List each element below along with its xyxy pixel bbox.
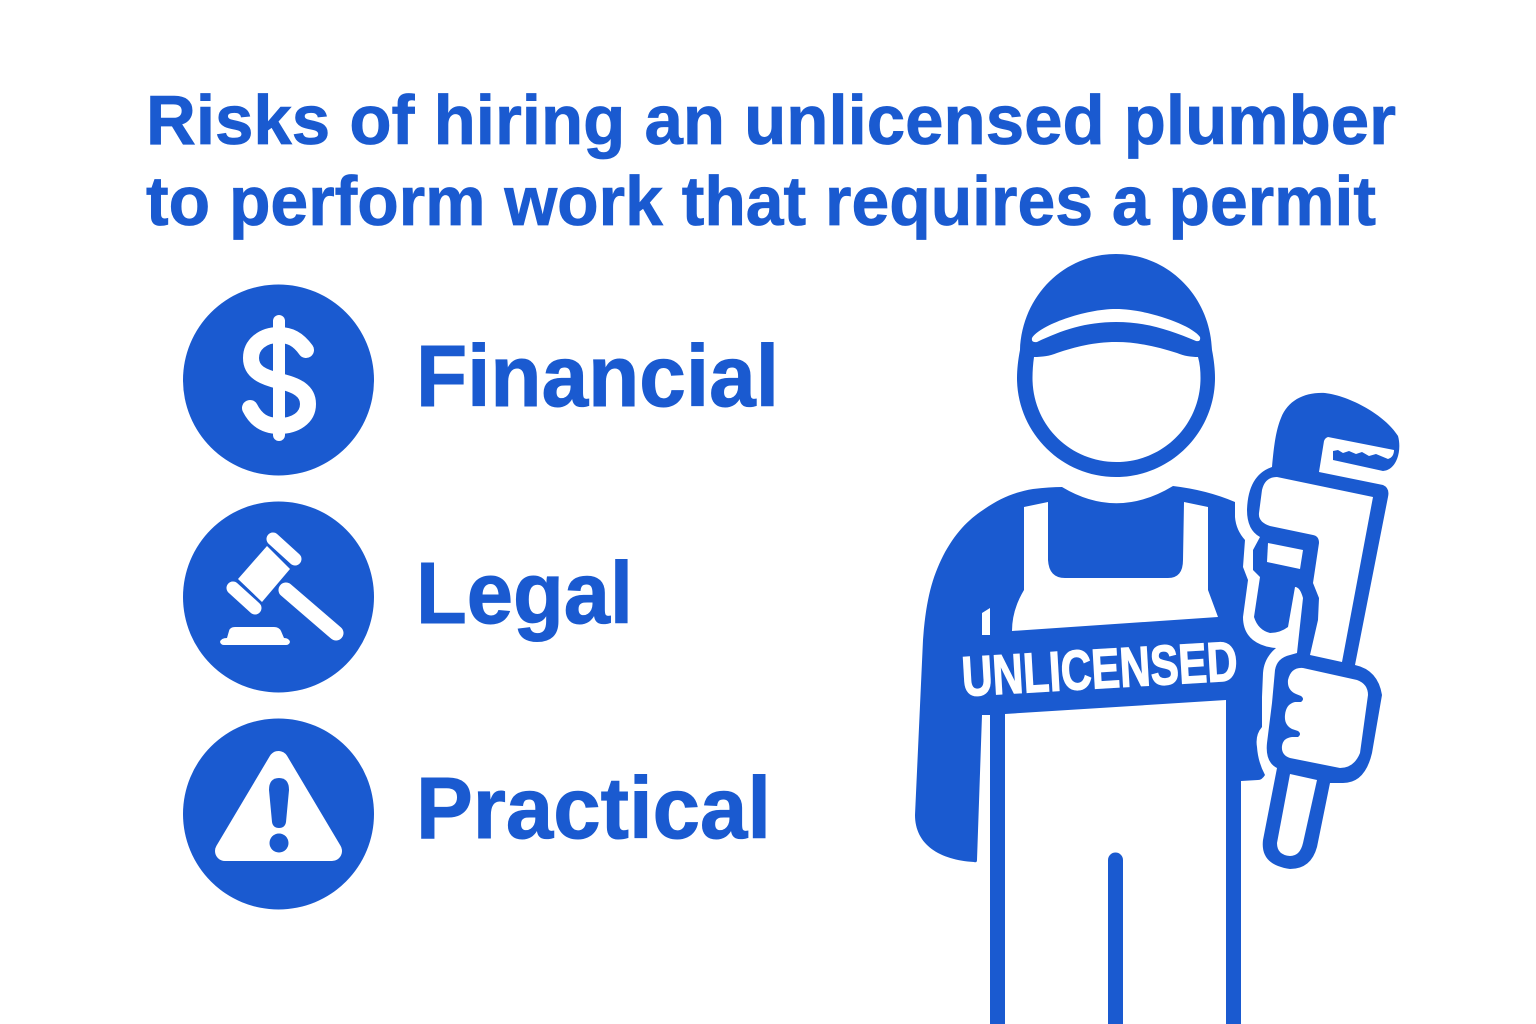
label: Financial: Financial [416, 328, 779, 425]
head and cap [1017, 254, 1215, 477]
trouser centre seam [1108, 860, 1123, 1024]
plumber figure [915, 254, 1399, 1024]
icon: dollar in circle [183, 284, 374, 476]
hand [1282, 668, 1368, 768]
wrench handle interior [1277, 774, 1317, 856]
icon: warning triangle in circle [183, 718, 374, 910]
title line 1: Risks of hiring an unlicensed plumber [146, 81, 1396, 159]
title line 2: to perform work that requires a permit [146, 162, 1376, 240]
overall bib cutout [1012, 502, 1218, 631]
icon: gavel in circle [183, 502, 374, 692]
label: Practical: Practical [416, 760, 771, 857]
body with overalls [915, 486, 1276, 1024]
wrench body interior [1259, 477, 1373, 662]
badge text: UNLICENSED: UNLICENSED [960, 629, 1239, 708]
label: Legal: Legal [416, 545, 633, 642]
risk item: financial [183, 284, 779, 476]
title [146, 81, 1396, 240]
risk item: legal [183, 502, 633, 692]
risk item: practical [183, 718, 771, 910]
adjustment nut window [1267, 543, 1303, 569]
pipe wrench held in hand [1247, 393, 1399, 869]
